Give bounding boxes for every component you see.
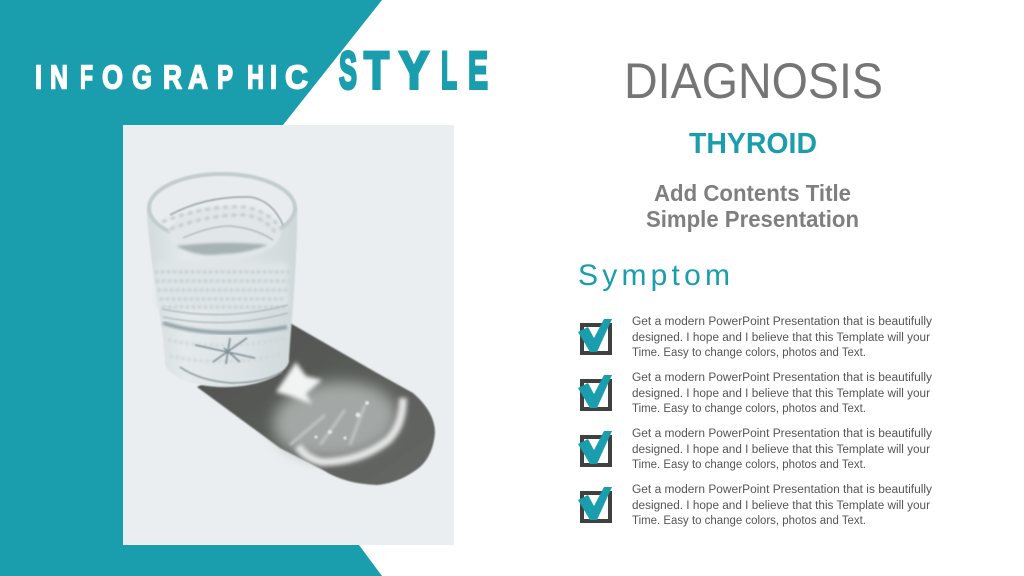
heading: THYROID: THYROID (689, 128, 817, 160)
item 4 (578, 484, 932, 527)
title: STYLE: T (364, 42, 389, 100)
title: INFOGRAPHIC: A (188, 58, 208, 96)
item 4: designed. I hope and I believe that this Template will your (632, 500, 930, 512)
item 2 (578, 372, 932, 415)
item 4: Time. Easy to change colors, photos and Text. (632, 515, 866, 527)
title: STYLE: Y (399, 42, 429, 100)
title: INFOGRAPHIC: N (50, 58, 68, 96)
title: INFOGRAPHIC: C (285, 58, 308, 96)
item 3 (578, 428, 932, 471)
item 4: Get a modern PowerPoint Presentation that is beautifully (632, 484, 932, 496)
item 2: designed. I hope and I believe that this Template will your (632, 388, 930, 400)
title: STYLE: L (441, 42, 457, 100)
title: INFOGRAPHIC: O (102, 58, 123, 96)
title: INFOGRAPHIC: H (247, 58, 264, 96)
item 2: Time. Easy to change colors, photos and Text. (632, 403, 866, 415)
symptom list (578, 316, 932, 527)
shadow of the glass (197, 323, 435, 485)
heading: DIAGNOSIS: DIAGNOSIS (624, 53, 883, 109)
title: STYLE: S (339, 42, 357, 100)
item 3: Time. Easy to change colors, photos and Text. (632, 459, 866, 471)
item 2: Get a modern PowerPoint Presentation that is beautifully (632, 372, 932, 384)
item 3: Get a modern PowerPoint Presentation that is beautifully (632, 428, 932, 440)
title: STYLE: E (468, 42, 488, 100)
title: INFOGRAPHIC: G (132, 58, 152, 96)
item 1: designed. I hope and I believe that this Template will your (632, 332, 930, 344)
title: INFOGRAPHIC: I (35, 58, 42, 96)
item 3: designed. I hope and I believe that this Template will your (632, 444, 930, 456)
title: STYLE (339, 42, 488, 100)
item 1: Time. Easy to change colors, photos and Text. (632, 347, 866, 359)
heading: Symptom: Symptom (578, 259, 730, 292)
title: INFOGRAPHIC: P (217, 58, 233, 96)
title: INFOGRAPHIC (35, 58, 308, 96)
glass tumbler (147, 174, 297, 387)
title: INFOGRAPHIC: R (163, 58, 182, 96)
photo: glass of water with shadow (123, 125, 454, 545)
title: INFOGRAPHIC: I (270, 58, 277, 96)
subtitle: Add Contents Title (654, 180, 851, 206)
item 1: Get a modern PowerPoint Presentation that is beautifully (632, 316, 932, 328)
title: INFOGRAPHIC: F (80, 58, 93, 96)
subtitle (646, 180, 859, 232)
background: teal angled band (0, 0, 382, 576)
item 1 (578, 316, 932, 359)
subtitle: Simple Presentation (646, 206, 859, 232)
